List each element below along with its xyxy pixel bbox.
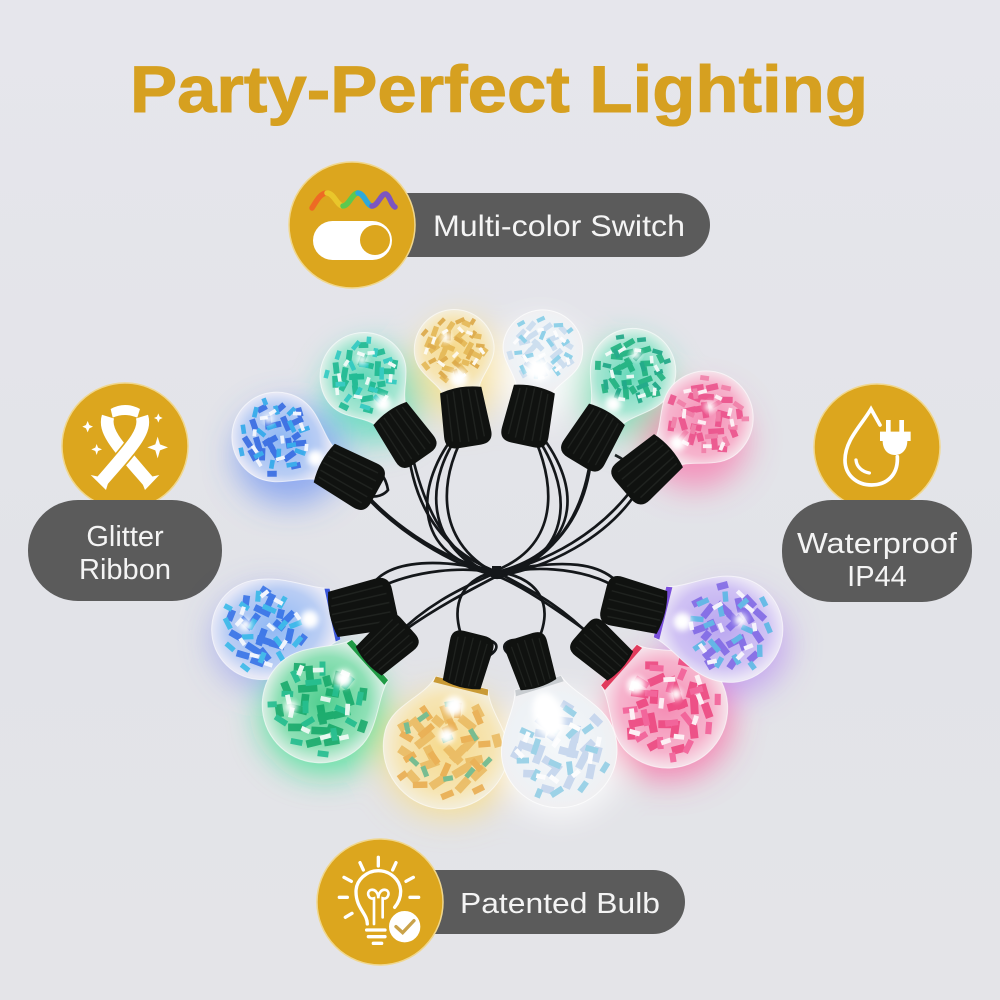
bulb: green (bottom left)	[238, 583, 447, 787]
bulb: blue-violet (bottom left)	[202, 552, 405, 689]
bulb: white (bottom)	[468, 619, 632, 823]
title: Party-Perfect Lighting	[130, 52, 868, 126]
bulb: warm yellow (bottom)	[370, 618, 535, 822]
label pill: multi-color switch	[350, 193, 710, 257]
wire harness	[345, 420, 644, 660]
label pill: patented bulb	[380, 870, 685, 934]
callout: multi-color switch	[289, 162, 710, 288]
bulb: white (top)	[483, 302, 590, 453]
bulb: teal	[303, 315, 458, 484]
label pill: glitter ribbon: Glitter	[86, 521, 164, 553]
label pill: waterproof: Waterproof	[797, 528, 958, 560]
icon: light bulb with check mark	[317, 839, 443, 965]
icon: rainbow wave and toggle	[289, 162, 415, 288]
bulb: pink (bottom right)	[541, 586, 752, 793]
bulb: pink (top right)	[592, 352, 773, 526]
label pill: glitter ribbon	[28, 500, 222, 601]
callout: glitter ribbon	[28, 383, 222, 601]
callout: waterproof	[782, 384, 972, 602]
label pill: glitter ribbon: Ribbon	[79, 554, 171, 586]
bulb: blue (top left)	[216, 376, 398, 531]
label pill: waterproof: IP44	[847, 561, 907, 593]
bulb: purple (bottom right)	[591, 547, 794, 694]
icon: water drop with plug	[814, 384, 940, 510]
label pill: patented bulb: Patented Bulb	[460, 888, 660, 920]
bulb: warm yellow (top)	[409, 304, 509, 453]
icon: ribbon with sparkles	[62, 383, 188, 509]
label pill: multi-color switch: Multi-color Switch	[433, 210, 685, 243]
callout: patented bulb	[317, 839, 685, 965]
bulb: green (top right)	[541, 312, 692, 485]
label pill: waterproof	[782, 500, 972, 602]
bulb glows	[212, 320, 788, 817]
